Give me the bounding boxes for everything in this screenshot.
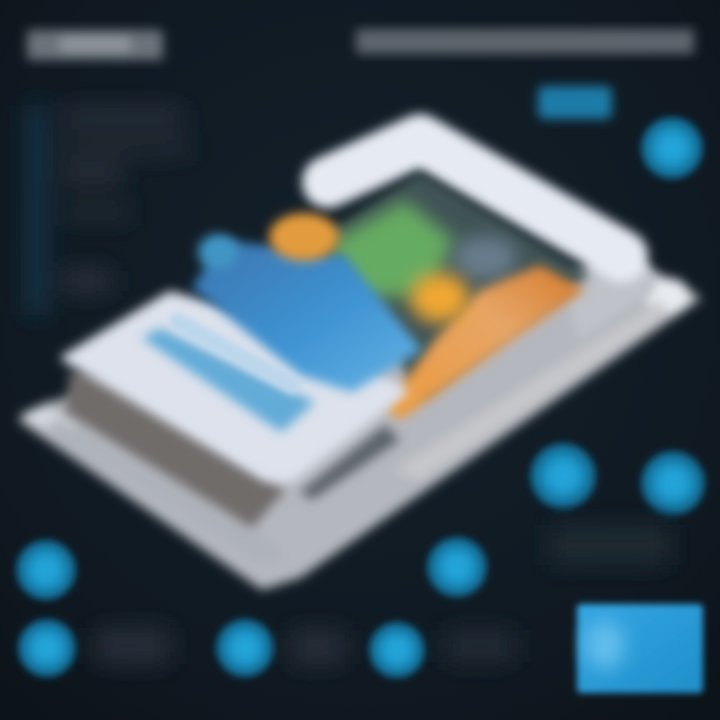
- grey area: [453, 236, 517, 280]
- blue pill badge: [538, 86, 612, 119]
- yellow-orange spot: [410, 273, 470, 323]
- orange wedge: [385, 265, 585, 420]
- subtitle heading: [356, 29, 694, 54]
- base plate: [18, 262, 702, 590]
- icon: top right dot: [640, 116, 704, 180]
- blue card: [192, 234, 422, 392]
- isometric device illustration: [18, 140, 702, 590]
- icon: center dot: [426, 536, 488, 598]
- light strip on slab: [142, 322, 315, 432]
- icon: lower left dot: [15, 539, 77, 601]
- icon: bottom left dot: [17, 618, 77, 678]
- green area: [325, 200, 455, 300]
- icon: bottom center dot: [368, 621, 426, 679]
- tablet frame: [328, 140, 655, 340]
- title block: [27, 30, 163, 60]
- orange circle: [269, 213, 339, 261]
- bottom captions: [95, 525, 670, 664]
- icon: right dot one: [529, 442, 597, 510]
- icon: bottom middle dot: [215, 618, 275, 678]
- icon: right dot two: [640, 450, 706, 516]
- blue panel: [577, 604, 703, 693]
- left text list: [28, 105, 192, 315]
- white slab: [64, 294, 405, 480]
- screen content: [325, 172, 590, 420]
- screen dark backdrop: [330, 172, 590, 400]
- slab side shadow: [65, 370, 400, 528]
